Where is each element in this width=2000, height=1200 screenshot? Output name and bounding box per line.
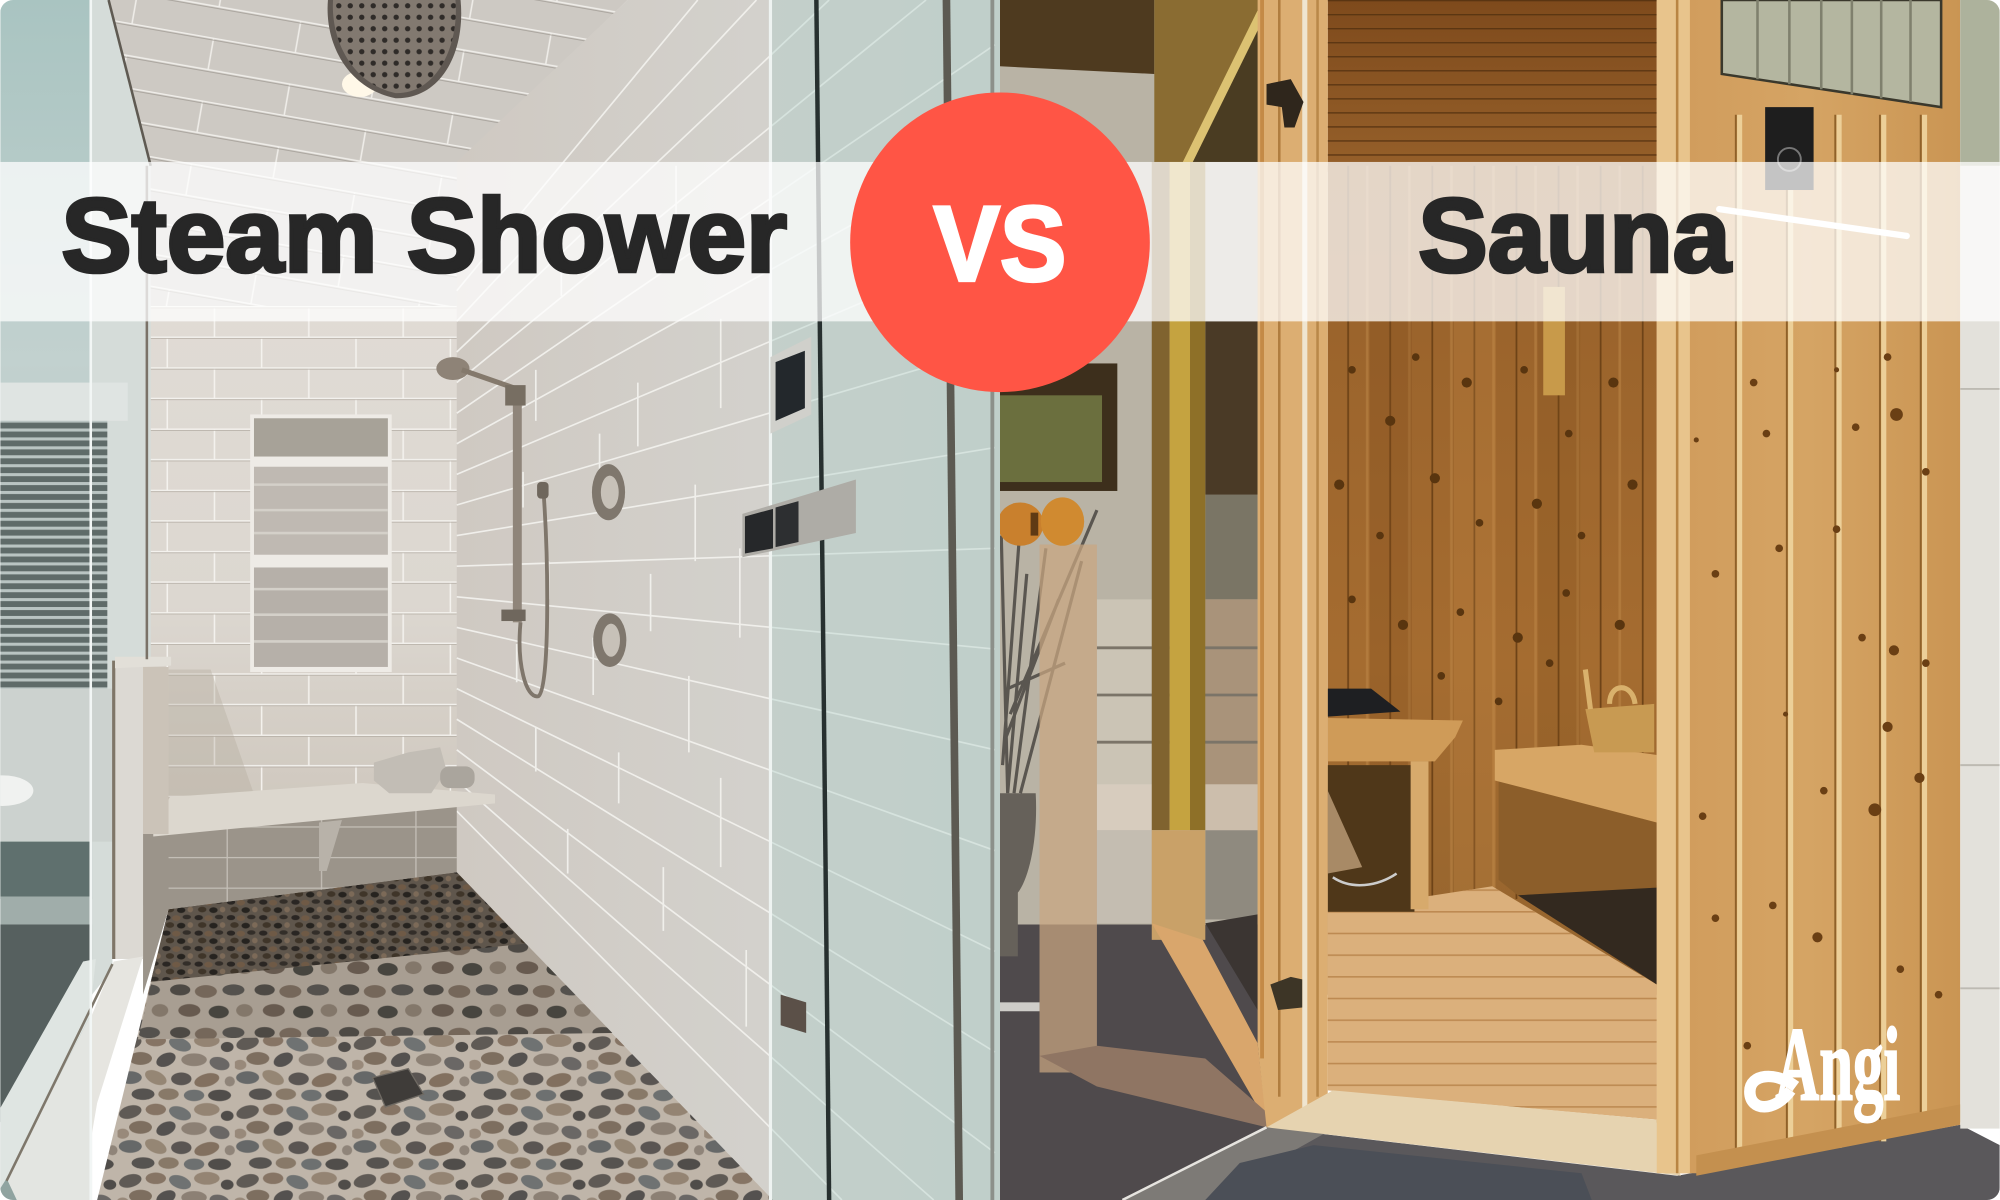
heading: Steam Shower: Steam Shower — [61, 178, 787, 295]
vase — [1000, 793, 1036, 956]
framed picture — [1000, 363, 1117, 491]
door latch — [781, 995, 806, 1033]
sauna floor — [1328, 886, 1657, 1120]
Angi logo: Angi — [1775, 1006, 1900, 1122]
dark gap under bench — [1518, 885, 1657, 984]
control panel — [742, 479, 856, 557]
digital controller — [1765, 107, 1814, 190]
door hinge upper — [1267, 79, 1304, 128]
bench — [153, 783, 495, 871]
sauna interior wall — [1328, 166, 1657, 995]
under bench panel — [1499, 780, 1657, 895]
lower wall under bench — [143, 803, 457, 995]
title banner strip — [0, 162, 2000, 321]
wall niche — [250, 414, 392, 672]
sauna bench — [1495, 745, 1657, 823]
hook rail over banner — [1719, 209, 1907, 236]
wooden bucket — [1585, 670, 1654, 752]
left photo: steam shower — [0, 0, 1000, 1200]
right wall tiles — [1960, 0, 2000, 1129]
corner wood panel — [1657, 0, 1960, 1176]
sauna window panel — [1722, 0, 1941, 107]
Angi logo — [1750, 1006, 1900, 1122]
room wall behind sauna — [1000, 0, 1258, 924]
entrance floor — [1122, 1125, 2000, 1200]
threshold — [1267, 1090, 1681, 1176]
floor drain — [373, 1069, 424, 1107]
side table — [1328, 718, 1463, 909]
room ceiling — [1000, 0, 1154, 74]
door hinge lower — [1270, 977, 1302, 1010]
right glass door — [770, 0, 1000, 1200]
dried plant stems — [1001, 510, 1097, 793]
heading: Sauna: Sauna — [1418, 178, 1732, 295]
reflected room through glass — [1097, 321, 1258, 1010]
side tile wall — [457, 0, 1000, 1200]
back tile wall — [143, 308, 457, 890]
tiled ceiling — [109, 0, 628, 306]
body spray valve lower — [593, 613, 626, 667]
hand shower fixture — [436, 357, 549, 696]
shower head — [328, 0, 461, 98]
towels — [374, 747, 475, 793]
right photo: sauna — [997, 0, 2000, 1200]
VS badge: VS — [934, 184, 1066, 304]
door frame — [1258, 0, 1328, 1127]
sauna ceiling — [1328, 0, 1657, 172]
room floor — [1000, 925, 1288, 1200]
heater unit — [1328, 689, 1414, 912]
digital control screen — [770, 337, 811, 434]
sauna glass door wood frame — [1040, 0, 1267, 1127]
body spray valve upper — [592, 464, 625, 520]
left glass panel — [0, 0, 171, 1200]
thermometer — [1543, 287, 1565, 395]
VS badge — [850, 92, 1150, 392]
door mat — [1205, 1145, 1592, 1200]
pebble floor — [97, 872, 773, 1200]
wooden door handle — [997, 497, 1084, 546]
white skirting strip — [1000, 1002, 1040, 1011]
